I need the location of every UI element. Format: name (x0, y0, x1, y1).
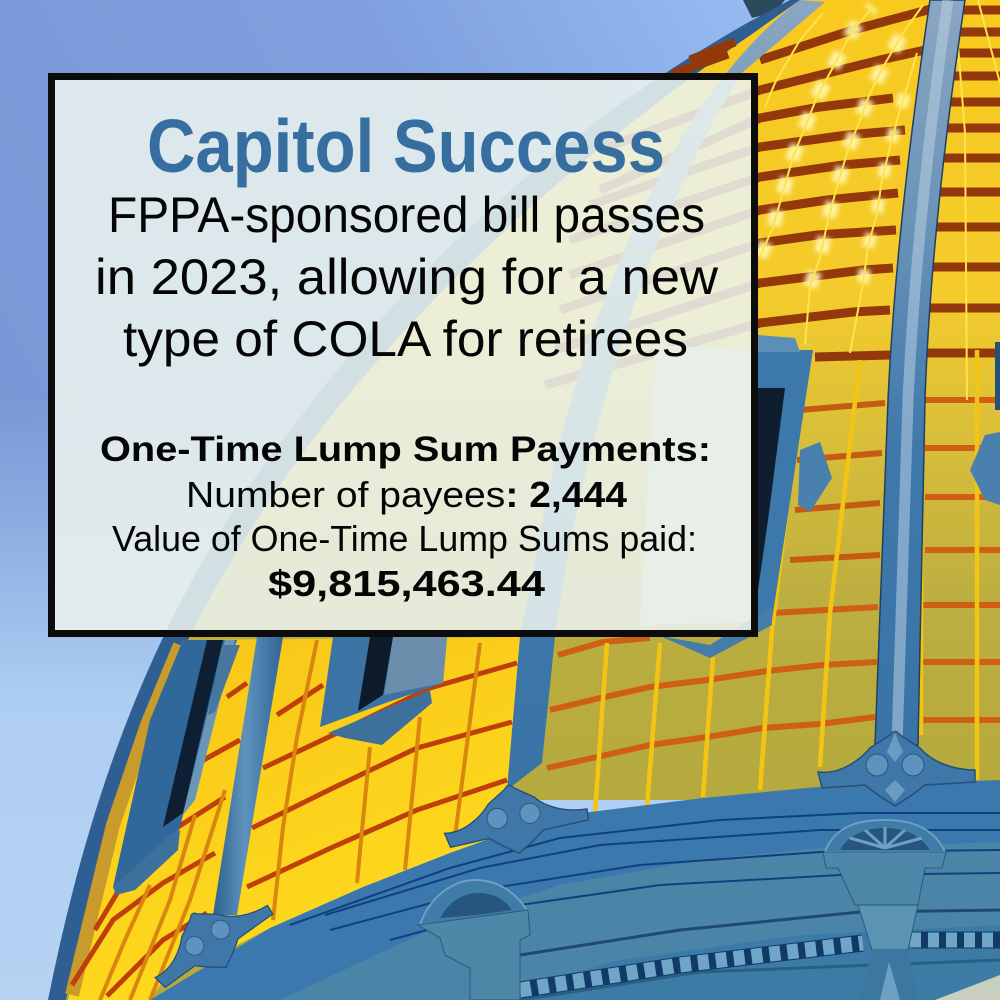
upper vertical seams with light highlights (760, 0, 1000, 400)
scroll ornament: third rib (137, 878, 284, 1000)
scroll ornament: second rib (439, 774, 592, 864)
subtitle line 2: in 2023, allowing for a new (95, 249, 719, 305)
scroll ornament: main rib (818, 732, 975, 806)
statistics heading: One-Time Lump Sum Payments: (100, 430, 711, 469)
keystone with fan: right (823, 820, 946, 1000)
title: Capitol Success (147, 104, 665, 188)
cornice base (150, 780, 1000, 1000)
lower left course lines (72, 663, 517, 996)
upper window with frame (640, 335, 832, 658)
keystone with fan: left (418, 880, 530, 1000)
dentil band (520, 940, 1000, 990)
dome lantern base (743, 0, 785, 18)
third dome rib (213, 637, 283, 915)
right edge window and scroll (970, 342, 1000, 505)
arched centre window (320, 637, 447, 745)
number of payees: Number of payees : 2,444 (186, 474, 627, 515)
second dome rib (507, 0, 825, 790)
lower left bright gold panels (68, 637, 550, 1000)
lower right course lines (547, 400, 1000, 768)
subtitle line 3: type of COLA for retirees (123, 311, 688, 367)
middle dome courses (790, 403, 885, 560)
lower left vertical seams (100, 640, 480, 1000)
value label: Value of One-Time Lump Sums paid: (112, 518, 697, 559)
lower right vertical seams (595, 350, 977, 813)
value amount: $9,815,463.44 (268, 563, 545, 604)
lump sum statistics (100, 430, 711, 604)
subtitle line 1: FPPA-sponsored bill passes (108, 187, 705, 243)
main dome rib (875, 0, 965, 745)
upper dome courses (545, 8, 1000, 385)
translucent text panel (52, 76, 754, 634)
subtitle (95, 187, 719, 367)
arched left window (113, 640, 240, 895)
